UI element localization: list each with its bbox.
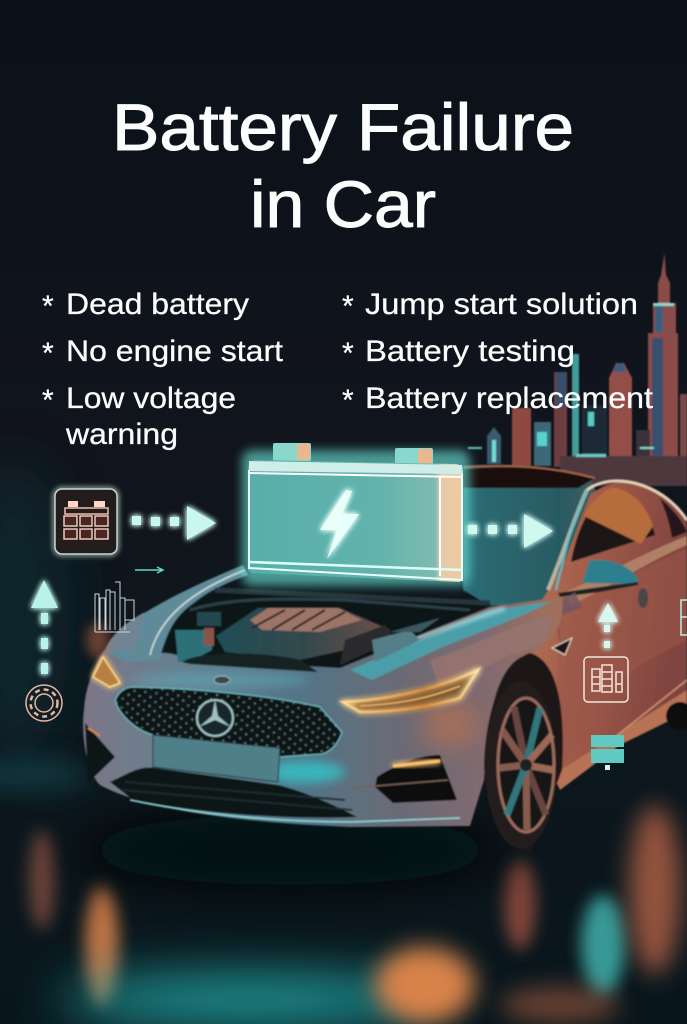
left fog lamp <box>85 723 115 783</box>
grille <box>115 687 342 757</box>
list: symptoms: warning <box>65 418 178 451</box>
right engine parts <box>340 618 440 665</box>
list: symptoms <box>42 288 284 451</box>
license plate <box>153 735 280 782</box>
list: solutions: * <box>342 337 354 370</box>
battery terminal left <box>273 443 311 461</box>
title <box>112 90 574 241</box>
title: in Car <box>250 167 436 241</box>
fluid reservoirs <box>175 612 221 662</box>
battery terminal right <box>395 448 433 467</box>
icon: battery levels <box>584 657 628 702</box>
right headlight <box>343 670 478 712</box>
list: solutions <box>342 288 654 417</box>
car front body <box>83 597 562 827</box>
list: solutions: Jump start solution <box>365 288 638 321</box>
list: symptoms: * <box>42 384 54 417</box>
list: symptoms: * <box>42 290 54 323</box>
car roof and windshield <box>463 466 600 606</box>
small arrow <box>135 567 163 573</box>
star emblem <box>197 700 233 736</box>
left fender and hood edge <box>86 565 248 662</box>
city skyline <box>468 253 687 486</box>
lower intake <box>110 767 357 818</box>
engine bay <box>163 585 492 672</box>
battery <box>242 443 470 586</box>
list: solutions: * <box>342 384 354 417</box>
list: symptoms: Dead battery <box>66 288 249 321</box>
icon: cyan data panel <box>591 735 624 770</box>
icon: lightning bolt <box>320 490 359 559</box>
car <box>83 466 687 855</box>
rear side window <box>660 498 687 538</box>
battery body <box>248 460 463 582</box>
icon: door panel edge <box>681 600 687 635</box>
right fog lamp <box>352 755 457 803</box>
car side body <box>500 481 687 790</box>
front side window <box>571 487 655 562</box>
arrow: up left <box>31 580 58 674</box>
arrow: battery to windshield <box>468 514 553 548</box>
title: Battery Failure <box>112 90 574 164</box>
front wheel <box>484 653 563 855</box>
icon: gear ring <box>26 685 62 721</box>
side mirror <box>545 560 638 620</box>
icon: skyline <box>95 582 134 632</box>
list: symptoms: * <box>42 337 54 370</box>
list: solutions: * <box>342 290 354 323</box>
arrow: up door <box>598 603 618 648</box>
arrow: panel to battery <box>132 506 216 540</box>
floor reflections <box>0 757 681 1024</box>
engine cover <box>216 608 390 660</box>
battery glow <box>242 450 470 586</box>
hood emblem <box>214 676 230 684</box>
list: solutions: Battery replacement <box>365 382 654 415</box>
left headlight <box>93 657 120 687</box>
icon: battery grid panel <box>55 489 117 554</box>
list: symptoms: No engine start <box>66 335 284 368</box>
list: symptoms: Low voltage <box>66 382 236 415</box>
list: solutions: Battery testing <box>365 335 575 368</box>
